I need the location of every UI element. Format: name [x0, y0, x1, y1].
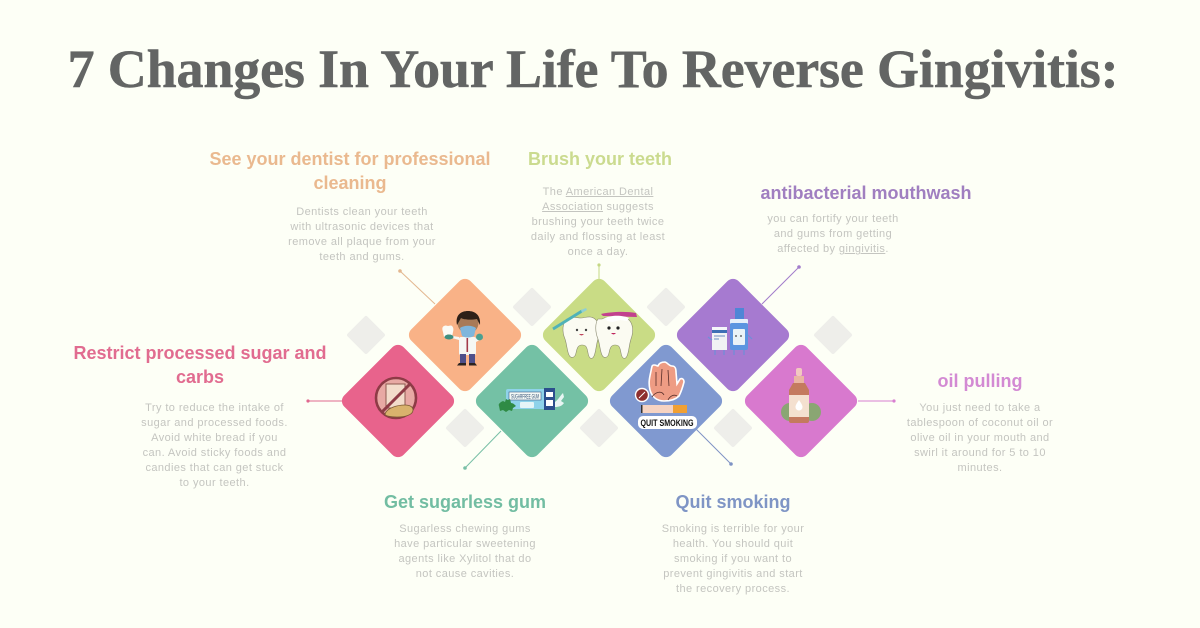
text: see your dentist: remove all plaque from your: [288, 236, 436, 248]
heading: sugarless gum: Get sugarless gum: [384, 492, 546, 512]
diamond: brush: [540, 276, 658, 394]
text: restrict processed sugar: can. Avoid sticky foods and: [143, 447, 286, 459]
icon: oil bottle: [781, 368, 821, 423]
icon: sugarless gum: [499, 388, 564, 412]
heading: oil pulling: oil pulling: [938, 371, 1022, 391]
text: see your dentist: teeth and gums.: [319, 251, 405, 263]
text: restrict processed sugar: Try to reduce the intake of: [145, 402, 284, 414]
connector: brush: [597, 263, 601, 280]
heading: restrict processed sugar: carbs: [176, 366, 224, 386]
text: restrict processed sugar: Avoid white bread if you: [151, 432, 278, 444]
text: oil pulling: minutes.: [958, 462, 1002, 474]
diamond: mouthwash: [674, 276, 792, 394]
text: antibacterial mouthwash: and gums from getting: [774, 228, 892, 240]
text: brush your teeth: brushing your teeth twice: [532, 216, 664, 228]
text: restrict processed sugar: candies that can get stuck: [145, 462, 284, 474]
heading: antibacterial mouthwash: antibacterial mouthwash: [760, 183, 972, 203]
text: brush your teeth: The American Dental: [543, 186, 653, 198]
text: see your dentist: [288, 206, 436, 263]
diamond: oil: [742, 342, 860, 460]
connector: dentist: [398, 269, 435, 304]
text: antibacterial mouthwash: affected by gingivitis.: [777, 243, 889, 255]
text: sugarless gum: [394, 523, 536, 580]
text: brush your teeth: Association suggests: [542, 201, 654, 213]
icon: sugarless gum: SUGARFREE GUM: [511, 394, 539, 400]
text: oil pulling: olive oil in your mouth and: [910, 432, 1050, 444]
icon: mouthwash: [708, 308, 752, 355]
diamond: gum: [473, 342, 591, 460]
text: oil pulling: You just need to take a: [919, 402, 1041, 414]
decorative grey diamonds: [346, 287, 853, 448]
text: brush your teeth: once a day.: [568, 246, 628, 258]
text: brush your teeth: daily and flossing at least: [531, 231, 665, 243]
diamond: smoking: [607, 342, 725, 460]
connector: mouthwash: [762, 265, 801, 304]
text: sugarless gum: have particular sweetening: [394, 538, 536, 550]
icon: quit smoking: [636, 362, 697, 429]
text: quit smoking: Smoking is terrible for your: [662, 523, 804, 535]
diamond: sugar: [339, 342, 457, 460]
icon: no bread: [376, 378, 416, 418]
connector: smoking: [696, 429, 733, 466]
text: restrict processed sugar: sugar and processed foods.: [141, 417, 288, 429]
heading: restrict processed sugar: Restrict processed sugar and: [73, 343, 327, 363]
text: see your dentist: with ultrasonic devices that: [290, 221, 434, 233]
text: brush your teeth: [531, 186, 665, 258]
diamond: dentist: [406, 276, 524, 394]
icon: teeth and brush: [553, 308, 637, 358]
text: quit smoking: prevent gingivitis and start: [663, 568, 803, 580]
text: antibacterial mouthwash: you can fortify your teeth: [767, 213, 899, 225]
text: quit smoking: [662, 523, 804, 595]
title: 7 Changes In Your Life To Reverse Gingivitis:: [68, 39, 1118, 99]
text: quit smoking: the recovery process.: [676, 583, 790, 595]
heading: restrict processed sugar: [73, 343, 327, 386]
text: quit smoking: health. You should quit: [673, 538, 793, 550]
text: oil pulling: swirl it around for 5 to 10: [914, 447, 1046, 459]
text: sugarless gum: agents like Xylitol that do: [398, 553, 532, 565]
heading: see your dentist: cleaning: [313, 172, 387, 192]
text: quit smoking: smoking if you want to: [674, 553, 792, 565]
heading: see your dentist: [209, 149, 491, 193]
icon: dentist: [442, 311, 483, 366]
text: antibacterial mouthwash: [767, 213, 899, 255]
connector: oil: [858, 399, 896, 403]
text: sugarless gum: Sugarless chewing gums: [399, 523, 531, 535]
heading: quit smoking: Quit smoking: [675, 492, 790, 512]
text: oil pulling: [907, 402, 1053, 474]
text: oil pulling: tablespoon of coconut oil or: [907, 417, 1053, 429]
connector: gum: [463, 431, 501, 470]
heading: brush your teeth: Brush your teeth: [528, 149, 672, 169]
text: restrict processed sugar: [141, 402, 288, 489]
text: restrict processed sugar: to your teeth.: [179, 477, 250, 489]
text: sugarless gum: not cause cavities.: [416, 568, 514, 580]
text: see your dentist: Dentists clean your teeth: [296, 206, 428, 218]
icon: quit smoking: QUIT SMOKING: [640, 418, 694, 428]
connector: sugar: [306, 399, 343, 403]
heading: see your dentist: See your dentist for professional: [209, 149, 491, 169]
